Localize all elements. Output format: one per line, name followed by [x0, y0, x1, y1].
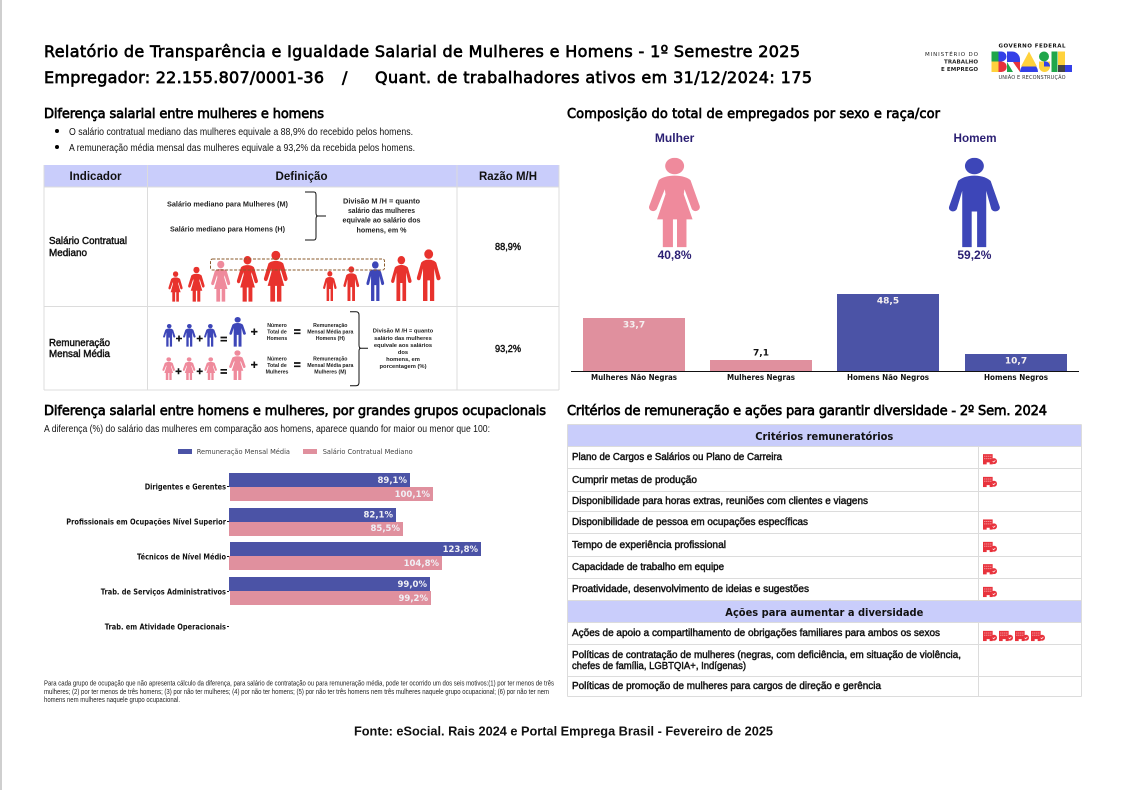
bar chart: composition by sex and race: Homens Negros [984, 373, 1048, 382]
definition text: remuneração: Mensal Média para [307, 330, 353, 336]
bar chart: composition by sex and race: Mulheres Negras [727, 373, 795, 382]
bar chart: composition by sex and race: 7,1 [753, 348, 769, 358]
table header [70, 171, 537, 183]
legend: Remuneração Mensal Média [197, 448, 290, 456]
heading: diferença salarial: Diferença salarial entre mulheres e homens [44, 107, 324, 122]
icon: man share [949, 131, 1000, 262]
bullet text [55, 127, 415, 154]
definition text: remuneração: dos [398, 350, 408, 356]
row labels: Mensal Média [49, 349, 110, 360]
icon: man share: 59,2% [957, 248, 992, 262]
definition text: remuneração: Mulheres [266, 369, 288, 375]
brace [350, 312, 368, 386]
bar chart: occupational groups [66, 473, 481, 632]
bar chart: occupational groups: 82,1% [364, 510, 393, 520]
bar chart: occupational groups: Profissionais em Ocupações Nível Superior [66, 518, 226, 526]
icon: man share: Homem [954, 131, 996, 145]
footnote [44, 680, 554, 704]
table header: Razão M/H [479, 171, 537, 183]
definition text: remuneração: Total de [267, 363, 287, 369]
definition text: remuneração: Remuneração [313, 323, 347, 329]
bar chart: occupational groups: 85,5% [370, 524, 400, 534]
icon: woman share [649, 131, 700, 262]
bar chart: occupational groups: Trab. em Atividade Operacionais [105, 622, 226, 632]
logo: Ministério do Trabalho e Emprego: MINISTÉRIO DO [925, 50, 979, 58]
definition text: remuneração: Número [267, 356, 287, 362]
definition text: salário mediano: Divisão M /H = quanto [343, 198, 420, 206]
bar chart: occupational groups: 89,1% [378, 476, 407, 486]
criteria labels: Ações de apoio a compartilhamento de obrigações familiares para ambos os sexos [572, 628, 940, 639]
panel: indicator table [44, 165, 559, 390]
bar chart: occupational groups: 100,1% [395, 490, 430, 500]
legend [178, 448, 413, 456]
source: Fonte: eSocial. Rais 2024 e Portal Emprega Brasil - Fevereiro de 2025 [354, 724, 773, 738]
icon: woman share: 40,8% [658, 248, 692, 262]
definition text: salário mediano: equivale ao salário dos [342, 218, 421, 224]
row labels: 93,2% [495, 344, 521, 355]
title: / [342, 68, 348, 87]
row labels: 88,9% [495, 242, 521, 253]
title [44, 42, 812, 87]
bar chart: composition by sex and race [571, 294, 1079, 382]
footnote: Para cada grupo de ocupação que não apresenta cálculo da diferença, para salário de contratação ou para remuneração média, pode ter ocorrido um dos seis motivos:(1) por ter menos de três [44, 680, 554, 688]
row labels: Remuneração [49, 338, 110, 349]
table section headers: Ações para aumentar a diversidade [725, 607, 923, 619]
criteria labels: Disponibilidade de pessoa em ocupações específicas [572, 517, 808, 528]
bar chart: composition by sex and race: Homens Não Negros [847, 373, 929, 382]
heading: composição: Composição do total de empregados por sexo e raça/cor [567, 107, 941, 122]
logo: Governo Federal Brasil [992, 43, 1072, 81]
definition text: remuneração: Divisão M /H = quanto [373, 329, 434, 335]
criteria labels: Políticas de promoção de mulheres para cargos de direção e gerência [572, 681, 881, 692]
icon: woman share: Mulher [655, 131, 695, 145]
criteria labels: Proatividade, desenvolvimento de ideias e sugestões [572, 584, 809, 595]
definition text: remuneração [266, 323, 434, 375]
table header: Definição [276, 171, 328, 183]
title: Empregador: 22.155.807/0001-36 [44, 68, 324, 87]
criteria labels [572, 452, 961, 692]
logo: Ministério do Trabalho e Emprego [925, 50, 979, 73]
heading: critérios: Critérios de remuneração e ações para garantir diversidade - 2º Sem. 2024 [567, 404, 1047, 419]
bar chart: occupational groups: Dirigentes e Gerentes [145, 482, 226, 492]
title: Quant. de trabalhadores ativos em 31/12/2024: 175 [375, 68, 812, 87]
logo: Governo Federal Brasil: UNIÃO E RECONSTRUÇÃO [998, 74, 1066, 81]
bar chart: occupational groups: 99,0% [398, 580, 427, 590]
definition text: remuneração: Número [267, 323, 287, 329]
table header: Indicador [70, 171, 122, 183]
bar chart: composition by sex and race: 33,7 [623, 320, 645, 330]
definition text: salário mediano [167, 198, 421, 234]
bar chart: composition by sex and race: 48,5 [877, 296, 899, 306]
icons: company markers [983, 454, 1045, 641]
bar chart: occupational groups: Técnicos de Nível Médio [137, 552, 226, 562]
definition text: remuneração: Homens [267, 336, 287, 342]
definition text: remuneração: Mulheres (M) [314, 369, 347, 375]
footnote: homens nem mulheres naquele grupo ocupacional. [44, 697, 180, 704]
logo: Governo Federal Brasil: GOVERNO FEDERAL [998, 43, 1066, 49]
footnote: mulheres; (2) por ter menos de três homens; (3) por não ter mulheres; (4) por não ter homens; (5) por não ter três homens nem três mulheres naquele grupo ocupacional; (6) por não ter nem [44, 689, 549, 696]
table section headers: Critérios remuneratórios [755, 431, 893, 443]
heading: grupos ocupacionais: Diferença salarial entre homens e mulheres, por grandes grupos ocupacionais [44, 404, 546, 419]
criteria labels: Políticas de contratação de mulheres (negras, com deficiência, em situação de violência, [572, 650, 961, 661]
bar chart: composition by sex and race: 10,7 [1005, 356, 1027, 366]
definition text: salário mediano: homens, em % [356, 228, 407, 234]
logo: Ministério do Trabalho e Emprego: TRABALHO [944, 60, 978, 66]
legend: Salário Contratual Mediano [323, 448, 413, 456]
average remuneration illustration [162, 317, 300, 380]
row labels: Salário Contratual [49, 236, 127, 247]
table section headers [725, 431, 923, 619]
definition text: remuneração: homens, em [386, 357, 420, 363]
definition text: remuneração: porcentagem (%) [379, 364, 427, 370]
title: Relatório de Transparência e Igualdade Salarial de Mulheres e Homens - 1º Semestre 2025 [44, 42, 800, 61]
definition text: remuneração: Mensal Média para [307, 363, 353, 369]
definition text: remuneração: Remuneração [313, 356, 347, 362]
criteria labels: Plano de Cargos e Salários ou Plano de Carreira [572, 452, 782, 463]
subheading: A diferença (%) do salário das mulheres em comparação aos homens, aparece quando for maior ou menor que 100: [44, 424, 490, 435]
criteria labels: Capacidade de trabalho em equipe [572, 562, 724, 573]
definition text: salário mediano: Salário mediano para Mulheres (M) [167, 202, 288, 208]
bullet text: O salário contratual mediano das mulheres equivale a 88,9% do recebido pelos homens. [69, 127, 413, 138]
definition text: remuneração: Total de [267, 330, 287, 336]
logo: Ministério do Trabalho e Emprego: E EMPREGO [941, 67, 978, 73]
row labels: Mediano [49, 248, 87, 259]
row labels [49, 236, 521, 360]
bar chart: occupational groups: 104,8% [404, 559, 439, 569]
criteria labels: Disponibilidade para horas extras, reuniões com clientes e viagens [572, 496, 868, 507]
panel: criteria table [568, 424, 1082, 696]
definition text: remuneração: Homens (H) [316, 336, 345, 342]
definition text: remuneração: salário das mulheres [374, 336, 432, 342]
median illustration [168, 249, 441, 302]
definition text: salário mediano: salário das mulheres [348, 208, 415, 215]
criteria labels: Cumprir metas de produção [572, 475, 697, 486]
criteria labels: chefes de família, LGBTQIA+, Indígenas) [572, 661, 746, 672]
bar chart: occupational groups: 99,2% [398, 594, 428, 604]
bar chart: composition by sex and race: Mulheres Não Negras [591, 373, 677, 382]
definition text: remuneração: equivale aos salários [374, 343, 432, 349]
brace [305, 192, 326, 240]
bar chart: occupational groups: 123,8% [443, 545, 478, 555]
bullet text: A remuneração média mensal das mulheres equivale a 93,2% da recebida pelos homens. [69, 143, 415, 154]
bar chart: occupational groups: Trab. de Serviços Administrativos [101, 588, 226, 596]
criteria labels: Tempo de experiência profissional [572, 540, 726, 551]
definition text: salário mediano: Salário mediano para Homens (H) [170, 226, 285, 234]
